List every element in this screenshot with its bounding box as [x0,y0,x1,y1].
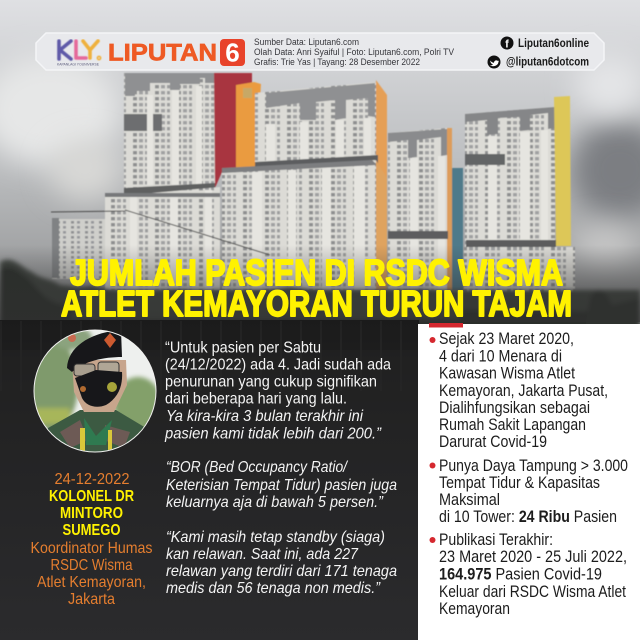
quote 3: relawan yang terdiri dari 171 tenaga [166,563,397,580]
quote text [164,339,397,597]
fact 1: Sejak 23 Maret 2020, [439,330,574,348]
panel: dark quote panel [0,320,419,640]
fact 1: 4 dari 10 Menara di [439,348,562,366]
quote 1: Ya kira-kira 3 bulan terakhir ini [166,408,363,425]
panel: white facts panel [418,324,640,640]
speaker caption: MINTORO [60,505,123,522]
logo: KLY [57,41,101,66]
quote 3: kan relawan. Saat ini, ada 227 [166,546,359,563]
speaker caption: KOLONEL DR [49,488,134,505]
fact 2 [430,457,628,526]
title: JUMLAH PASIEN DI RSDC WISMA [70,252,563,293]
header banner [36,33,604,70]
quote 3 [166,529,397,597]
fact 1: Kawasan Wisma Atlet [439,364,575,382]
facts text [430,330,628,618]
quote 3: medis dan 56 tenaga non medis.” [166,580,381,597]
quote 1: dari beberapa hari yang lalu. [165,391,347,408]
credits: Sumber Data: Liputan6.com [254,37,359,48]
quote 1: (24/12/2022) ada 4. Jadi sudah ada [165,356,391,373]
portrait: Kolonel Mintoro Sumego [34,330,156,452]
fact 2: di 10 Tower: 24 Ribu Pasien [439,508,617,526]
quote 2: Keterisian Tempat Tidur) pasien juga [166,477,397,494]
social: facebook [500,36,589,50]
fact 3: Kemayoran [439,600,510,618]
social: twitter [488,56,589,68]
quote 3: “Kami masih tetap standby (siaga) [166,529,385,546]
quote 1: penurunan yang cukup signifikan [165,374,377,391]
background photo: towers against cloudy sky [0,0,640,330]
social: twitter: @liputan6dotcom [506,56,589,68]
logo: Liputan 6: LIPUTAN [108,40,217,66]
fact 3 [430,531,627,618]
speaker caption: 24-12-2022 [54,471,130,488]
speaker caption: SUMEGO [62,522,120,539]
fact 2: Maksimal [439,491,500,509]
speaker caption: Koordinator Humas [30,540,152,557]
title [61,252,572,324]
credits: Olah Data: Anri Syaiful | Foto: Liputan6.com, Polri TV [254,47,455,58]
fact 1: Rumah Sakit Lapangan [439,416,586,434]
credits: Grafis: Trie Yas | Tayang: 28 Desember 2022 [254,57,420,68]
speaker caption: Jakarta [68,591,115,608]
fact 2: Tempat Tidur & Kapasitas [439,474,600,492]
quote 1: “Untuk pasien per Sabtu [165,339,321,356]
fact 3: Publikasi Terakhir: [439,531,553,549]
speaker caption: Atlet Kemayoran, [37,574,146,591]
credits [254,37,455,68]
quote 1: pasien kami tidak lebih dari 200.” [164,425,382,442]
fact 1: Darurat Covid-19 [439,433,547,451]
fact 3: 164.975 Pasien Covid-19 [439,566,602,584]
speaker caption [30,471,152,608]
quote 2: “BOR (Bed Occupancy Ratio/ [166,459,348,476]
social: facebook: Liputan6online [518,38,589,50]
social: facebook: f [505,38,509,50]
quote 1 [164,339,391,442]
fact 1 [430,330,608,451]
quote 2 [166,459,397,511]
logo: Liputan 6 [108,38,245,68]
red tab [429,323,463,328]
fact 1: Dialihfungsikan sebagai [439,399,590,417]
quote 2: keluarnya aja di bawah 5 persen.” [166,494,384,511]
speaker caption: RSDC Wisma [50,557,133,574]
fact 1: Kemayoran, Jakarta Pusat, [439,382,608,400]
logo: Liputan 6: 6 [225,38,240,68]
logo: KLY: KAPANLAGI YOUNIVERSE [57,62,100,66]
